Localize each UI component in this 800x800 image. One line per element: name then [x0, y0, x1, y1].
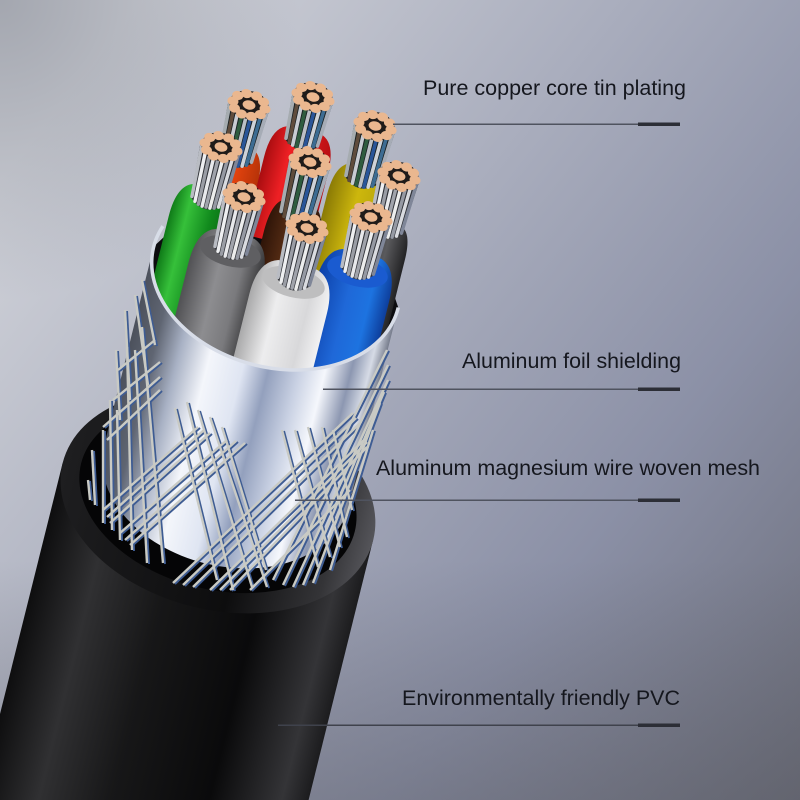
- callout: Aluminum magnesium wire woven mesh: [295, 456, 760, 502]
- aluminum foil sleeve: [82, 208, 408, 594]
- callout: Aluminum magnesium wire woven mesh: Aluminum magnesium wire woven mesh: [376, 456, 760, 480]
- wire: blue: [314, 201, 392, 368]
- wire: green: [154, 131, 242, 316]
- foil rim highlight: [132, 225, 404, 395]
- wire: black: [372, 160, 420, 336]
- wire: gray: [175, 181, 266, 356]
- wire: yellow: [316, 110, 396, 272]
- callout: Pure copper core tin plating: Pure copper core tin plating: [423, 76, 686, 100]
- callout: Environmentally friendly PVC: [278, 686, 680, 727]
- wire: brown: [260, 146, 332, 265]
- PVC jacket: [0, 358, 399, 800]
- cable illustration: [0, 74, 428, 800]
- callout: Aluminum foil shielding: Aluminum foil shielding: [462, 349, 681, 373]
- callout: Aluminum foil shielding: [323, 349, 681, 391]
- wire: red: [254, 81, 334, 239]
- insulated wires: [154, 81, 420, 368]
- callout: Pure copper core tin plating: [393, 76, 686, 126]
- wire: orange: [222, 89, 270, 187]
- wire: white: [234, 212, 330, 368]
- aluminum magnesium wire mesh: [88, 280, 390, 591]
- callout: Environmentally friendly PVC: Environmentally friendly PVC: [402, 686, 680, 710]
